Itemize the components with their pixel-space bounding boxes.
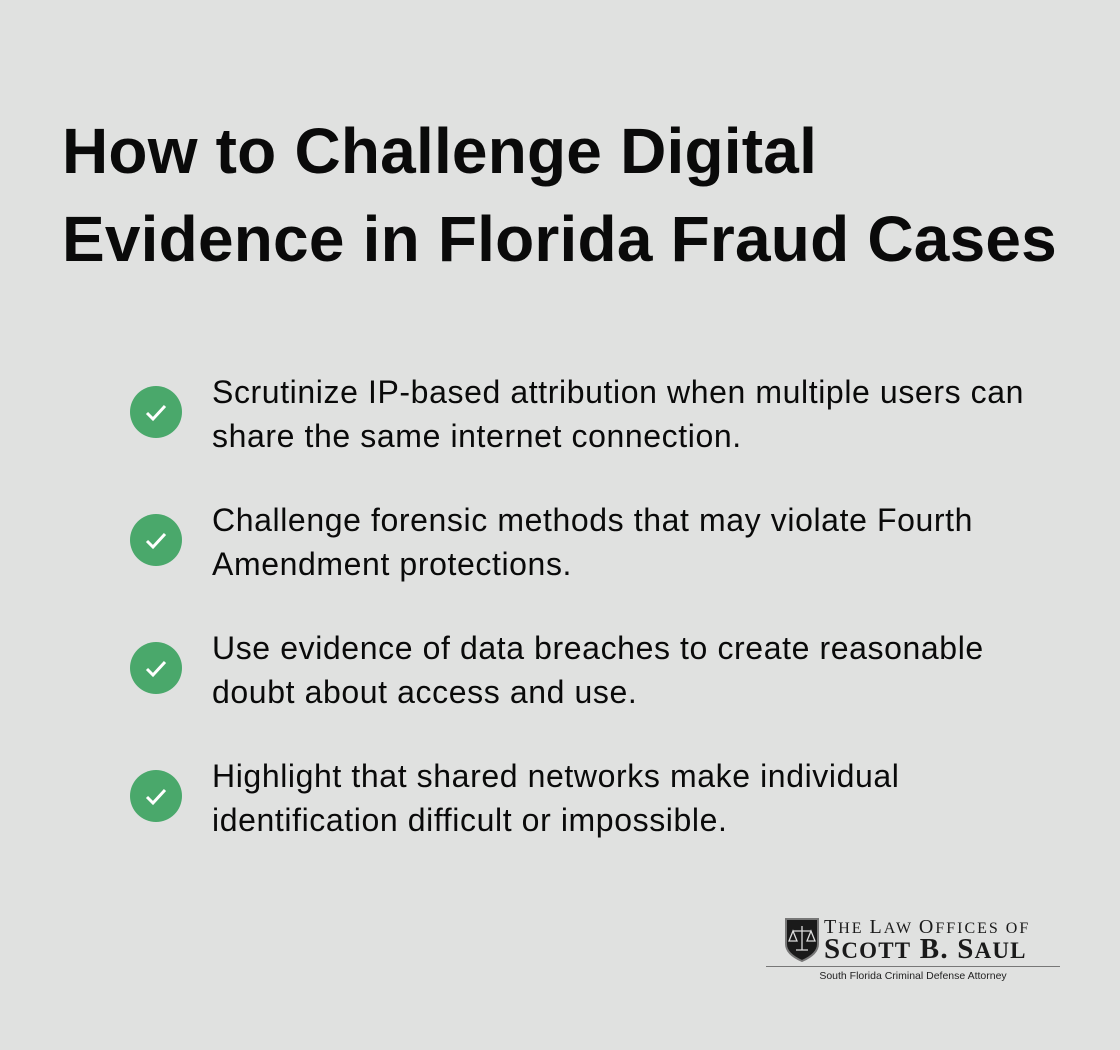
logo text: SCOTT B. SAUL: [824, 933, 1027, 965]
text 1: share the same internet connection.: [212, 418, 742, 454]
item 4: [130, 758, 900, 838]
title: How to Challenge Digital: [62, 115, 817, 187]
item 3: [130, 630, 984, 710]
title: [62, 115, 1057, 275]
text 2: Challenge forensic methods that may violate Fourth: [212, 502, 973, 538]
icon: check: [130, 514, 182, 566]
tagline: South Florida Criminal Defense Attorney: [819, 970, 1007, 982]
logo text: [824, 916, 1030, 965]
icon: shield: [785, 918, 819, 962]
title: Evidence in Florida Fraud Cases: [62, 203, 1057, 275]
icon: check: [130, 386, 182, 438]
text 3: doubt about access and use.: [212, 674, 637, 710]
text 4: [212, 758, 900, 838]
text 3: Use evidence of data breaches to create reasonable: [212, 630, 984, 666]
text 2: [212, 502, 973, 582]
text 2: Amendment protections.: [212, 546, 572, 582]
logo: [766, 916, 1060, 982]
text 1: [212, 374, 1024, 454]
icon: check: [130, 770, 182, 822]
logo text: THE LAW OFFICES OF: [824, 916, 1030, 938]
text 4: identification difficult or impossible.: [212, 802, 728, 838]
icon: check: [130, 642, 182, 694]
item 1: [130, 374, 1024, 454]
item 2: [130, 502, 973, 582]
text 1: Scrutinize IP-based attribution when multiple users can: [212, 374, 1024, 410]
text 3: [212, 630, 984, 710]
text 4: Highlight that shared networks make individual: [212, 758, 900, 794]
